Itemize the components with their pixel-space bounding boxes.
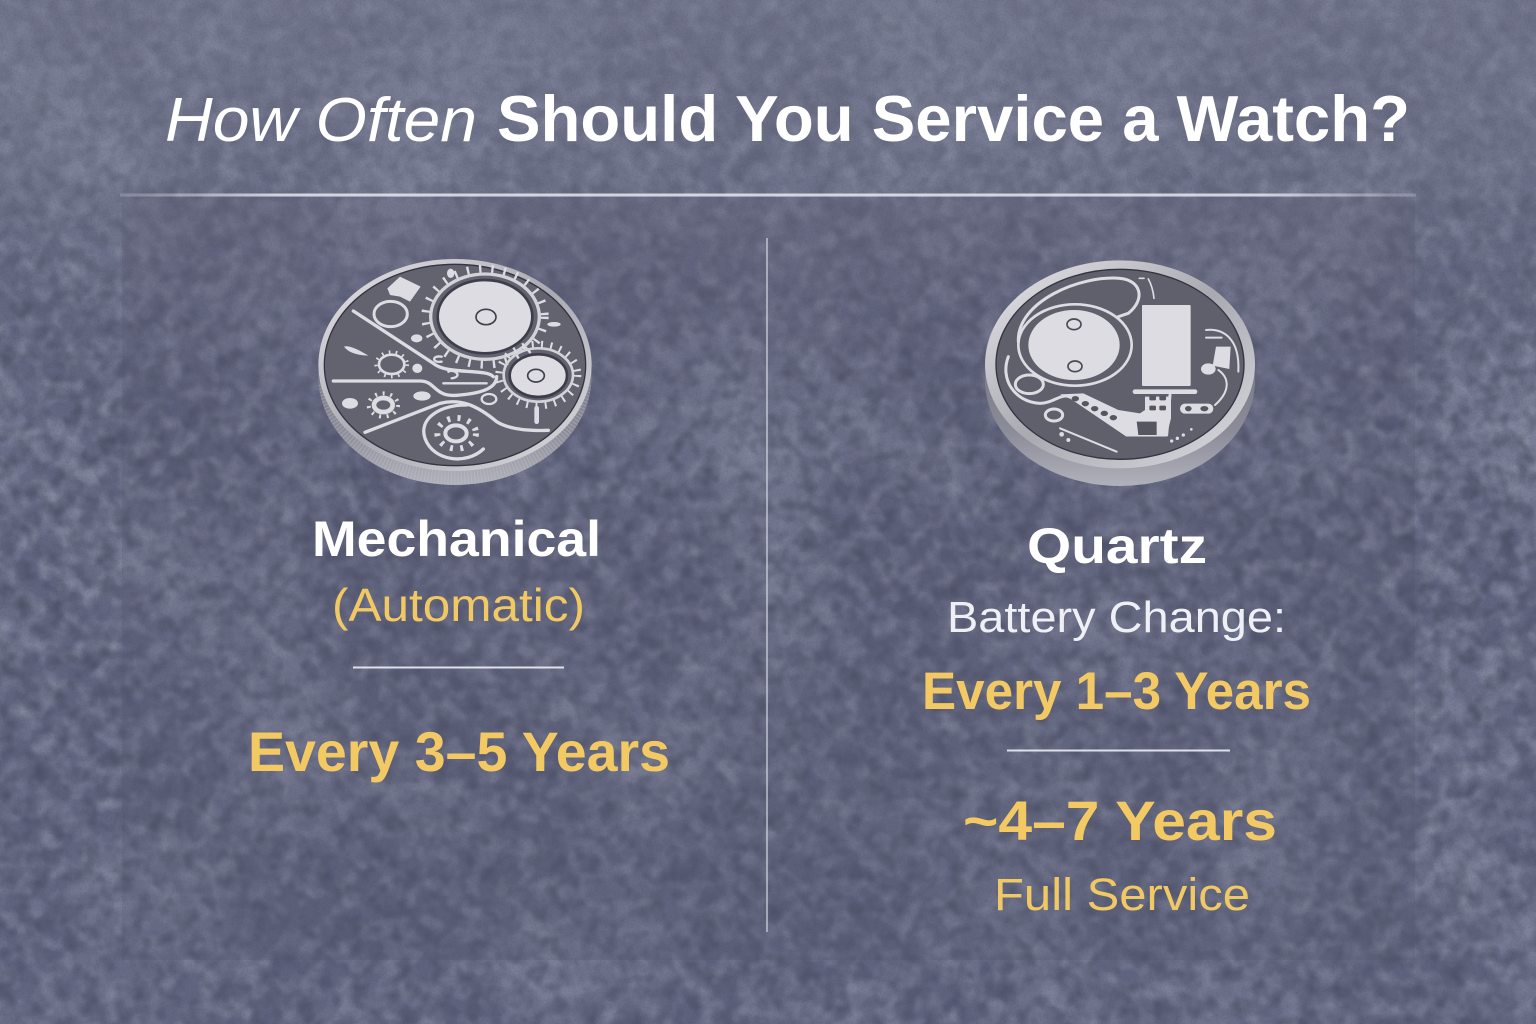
full service interval: ~4–7 Years: [963, 789, 1277, 852]
heading: mechanical: Mechanical: [312, 511, 601, 567]
heading: quartz: Quartz: [1027, 518, 1207, 574]
panel: quartz watches: [922, 260, 1311, 920]
label: automatic: (Automatic): [332, 579, 585, 631]
icon: mechanical movement coin: [318, 259, 592, 485]
label: full service: Full Service: [994, 869, 1250, 920]
title: Should You Service a Watch?: [497, 82, 1410, 155]
icon: quartz movement coin: [985, 260, 1255, 486]
panel: translucent comparison card: [122, 197, 1415, 960]
label: battery change: Battery Change:: [947, 593, 1286, 642]
battery interval: Every 1–3 Years: [922, 662, 1311, 721]
service interval: mechanical: Every 3–5 Years: [248, 720, 670, 783]
title: How Often: [165, 86, 477, 155]
panel: mechanical watches: [248, 259, 670, 783]
